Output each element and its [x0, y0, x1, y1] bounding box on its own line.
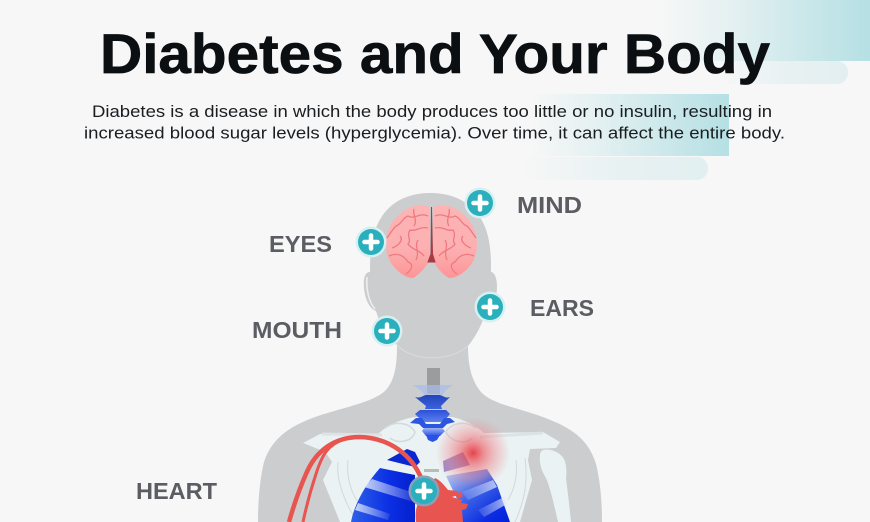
intro text — [84, 103, 785, 142]
heart — [416, 478, 468, 522]
background gradient bands — [520, 0, 870, 180]
body silhouette — [258, 193, 602, 522]
marker: eyes — [356, 226, 386, 258]
label: eyes: EYES — [269, 231, 332, 257]
marker: mouth — [372, 316, 402, 346]
label: ears: EARS — [530, 295, 594, 321]
blood vessels — [289, 437, 422, 522]
label: mind: MIND — [517, 192, 582, 218]
intro text: Diabetes is a disease in which the body produces too little or no insulin, resulting in — [92, 103, 772, 121]
right lung — [443, 452, 510, 522]
spine — [410, 368, 455, 442]
marker: ears — [474, 292, 506, 322]
marker: heart — [408, 476, 440, 506]
brain — [386, 205, 477, 278]
marker: mind — [464, 188, 496, 218]
intro text: increased blood sugar levels (hyperglycemia). Over time, it can affect the entire body. — [84, 124, 785, 142]
shoulder joint — [540, 450, 571, 522]
heart inflammation glow — [436, 417, 510, 489]
label: heart: HEART — [136, 478, 217, 504]
skeleton: clavicles, scapulae and ribcage — [303, 417, 571, 522]
title: Diabetes and Your Body — [100, 22, 770, 85]
label: mouth: MOUTH — [252, 317, 342, 343]
left lung — [351, 449, 420, 522]
